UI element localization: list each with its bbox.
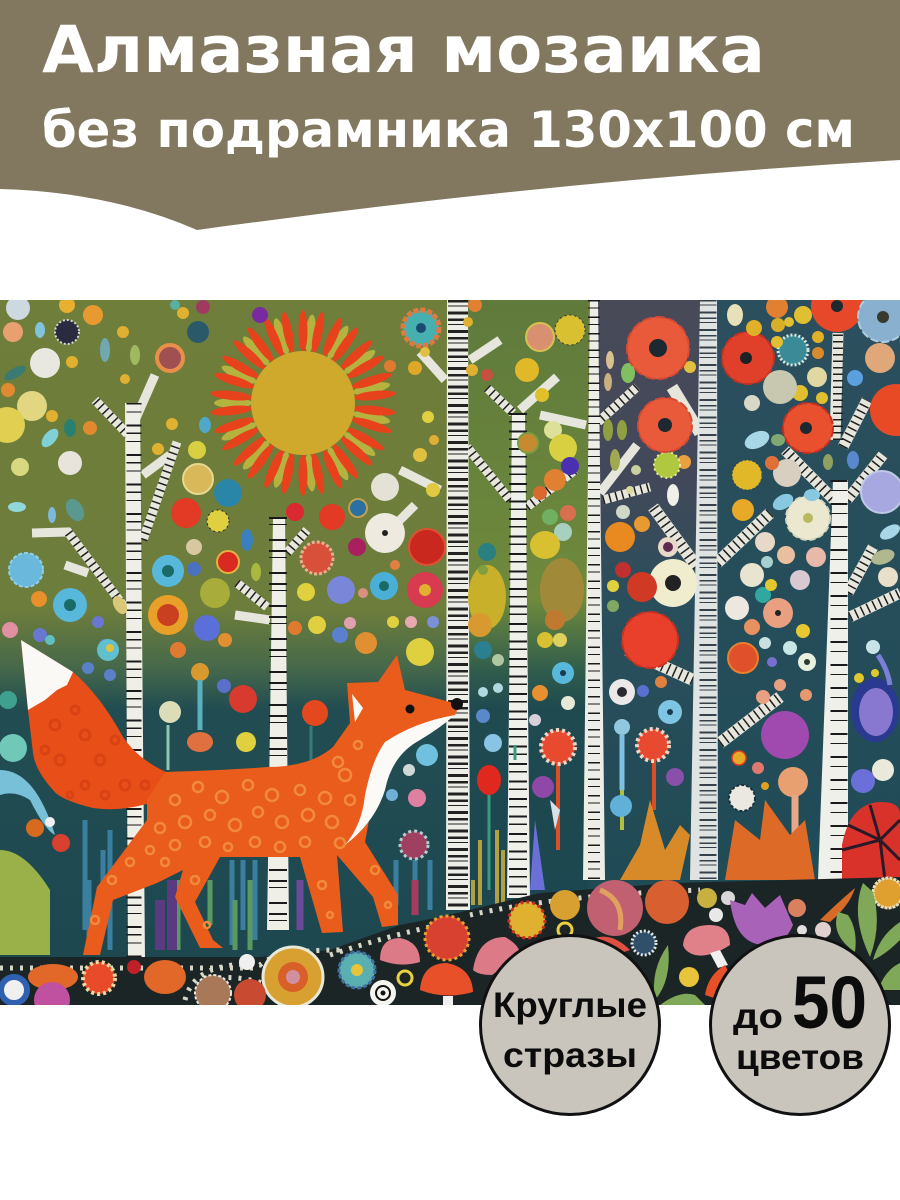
badge: round rhinestones: стразы xyxy=(503,1036,637,1075)
fox tail tip xyxy=(21,640,73,710)
undergrowth xyxy=(0,622,900,955)
birch trunks and branches xyxy=(32,300,900,960)
badge: round rhinestones xyxy=(480,936,660,1114)
painting background xyxy=(0,300,900,1005)
fox body and legs xyxy=(83,655,458,955)
flowers in the left canopy xyxy=(0,296,445,641)
badge: up to 50 colours: 50 xyxy=(792,961,867,1044)
badge: up to 50 colours xyxy=(710,936,890,1114)
flowers in the middle canopy xyxy=(463,298,697,726)
fox tail xyxy=(21,640,166,810)
badge: up to 50 colours: до xyxy=(733,997,783,1036)
fox ear and face xyxy=(352,694,363,722)
badge: round rhinestones: Круглые xyxy=(493,986,647,1025)
badge: up to 50 colours: цветов xyxy=(736,1038,864,1077)
stems and tall flowers xyxy=(477,719,795,890)
fox xyxy=(21,640,463,955)
flowery ground strip xyxy=(0,877,900,1018)
flowers in the right canopy xyxy=(722,280,900,811)
fox chest xyxy=(345,715,455,845)
title: Алмазная мозаика xyxy=(42,13,765,88)
mushrooms xyxy=(380,938,420,965)
header band xyxy=(0,0,900,230)
painting: fox in a birch forest xyxy=(0,280,900,1018)
subtitle: без подрамника 130х100 см xyxy=(42,101,855,159)
sun xyxy=(210,310,396,496)
